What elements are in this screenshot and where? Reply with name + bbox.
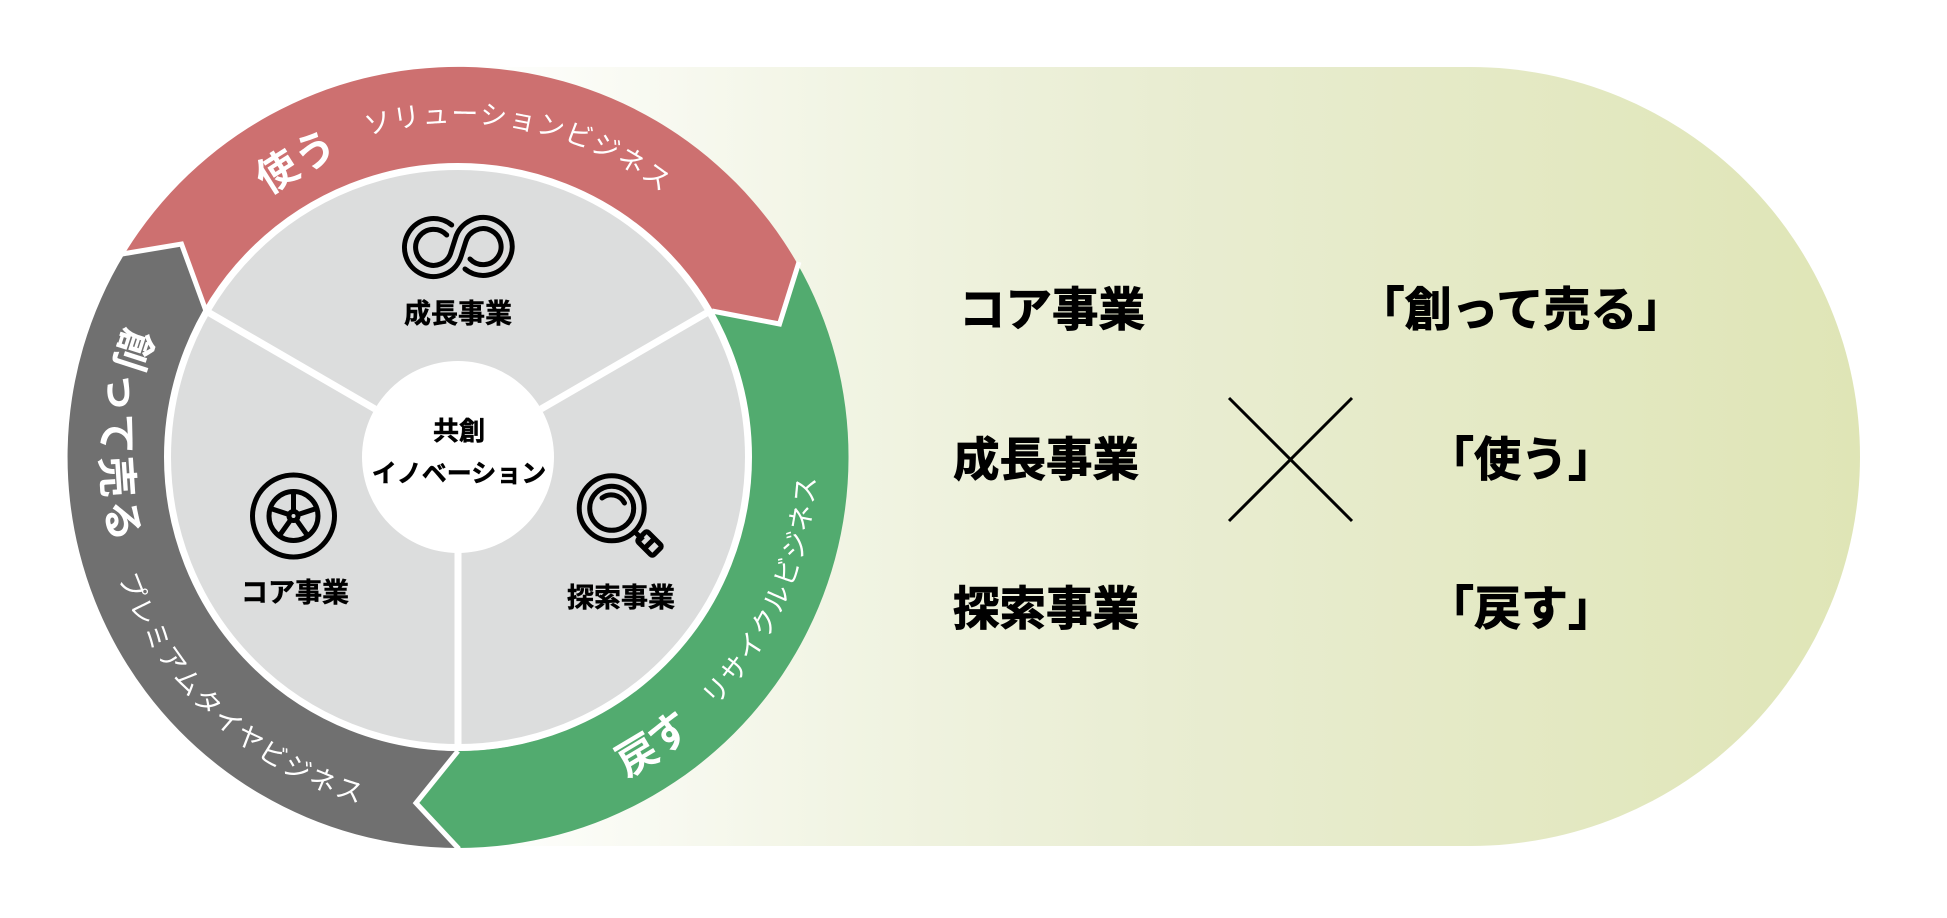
center label: 共創 (433, 416, 485, 446)
icon: magnifier (579, 476, 662, 556)
label: コア事業: コア事業 (241, 578, 349, 608)
center label (372, 416, 546, 488)
text: 戻す: 「戻す」 (1427, 582, 1615, 635)
inner disc (168, 166, 748, 748)
gradient pill background (458, 67, 1860, 846)
text: 成長事業: 成長事業 (953, 434, 1139, 486)
multiply cross (1229, 398, 1352, 521)
ring text: ソリューションビジネス: ソリューションビジネス (366, 104, 668, 190)
segment: 戻す (416, 263, 849, 848)
left column: business types (953, 284, 1145, 635)
label: 成長事業: 成長事業 (404, 299, 512, 329)
text: コア事業: コア事業 (959, 284, 1145, 336)
segment: 創って売る (68, 244, 458, 848)
ring text: 使う: 使う (258, 132, 329, 195)
text: 創って売る: 「創って売る」 (1358, 283, 1684, 336)
right column: actions (1358, 283, 1684, 635)
cycle diagram (68, 66, 848, 848)
ring text: プレミアムタイヤビジネス: プレミアムタイヤビジネス (120, 573, 360, 803)
icon: tire (252, 475, 334, 557)
text: 使う: 「使う」 (1427, 433, 1615, 486)
text: 探索事業: 探索事業 (953, 583, 1139, 635)
segment: 使う (125, 67, 797, 324)
center label: イノベーション (372, 460, 546, 488)
ring text: リサイクルビジネス: リサイクルビジネス (704, 480, 816, 700)
center circle (362, 361, 554, 553)
ring text: 戻す: 戻す (612, 711, 680, 778)
ring text: 創って売る: 創って売る (98, 326, 156, 536)
label: 探索事業: 探索事業 (567, 583, 675, 613)
icon: infinity (404, 217, 512, 277)
